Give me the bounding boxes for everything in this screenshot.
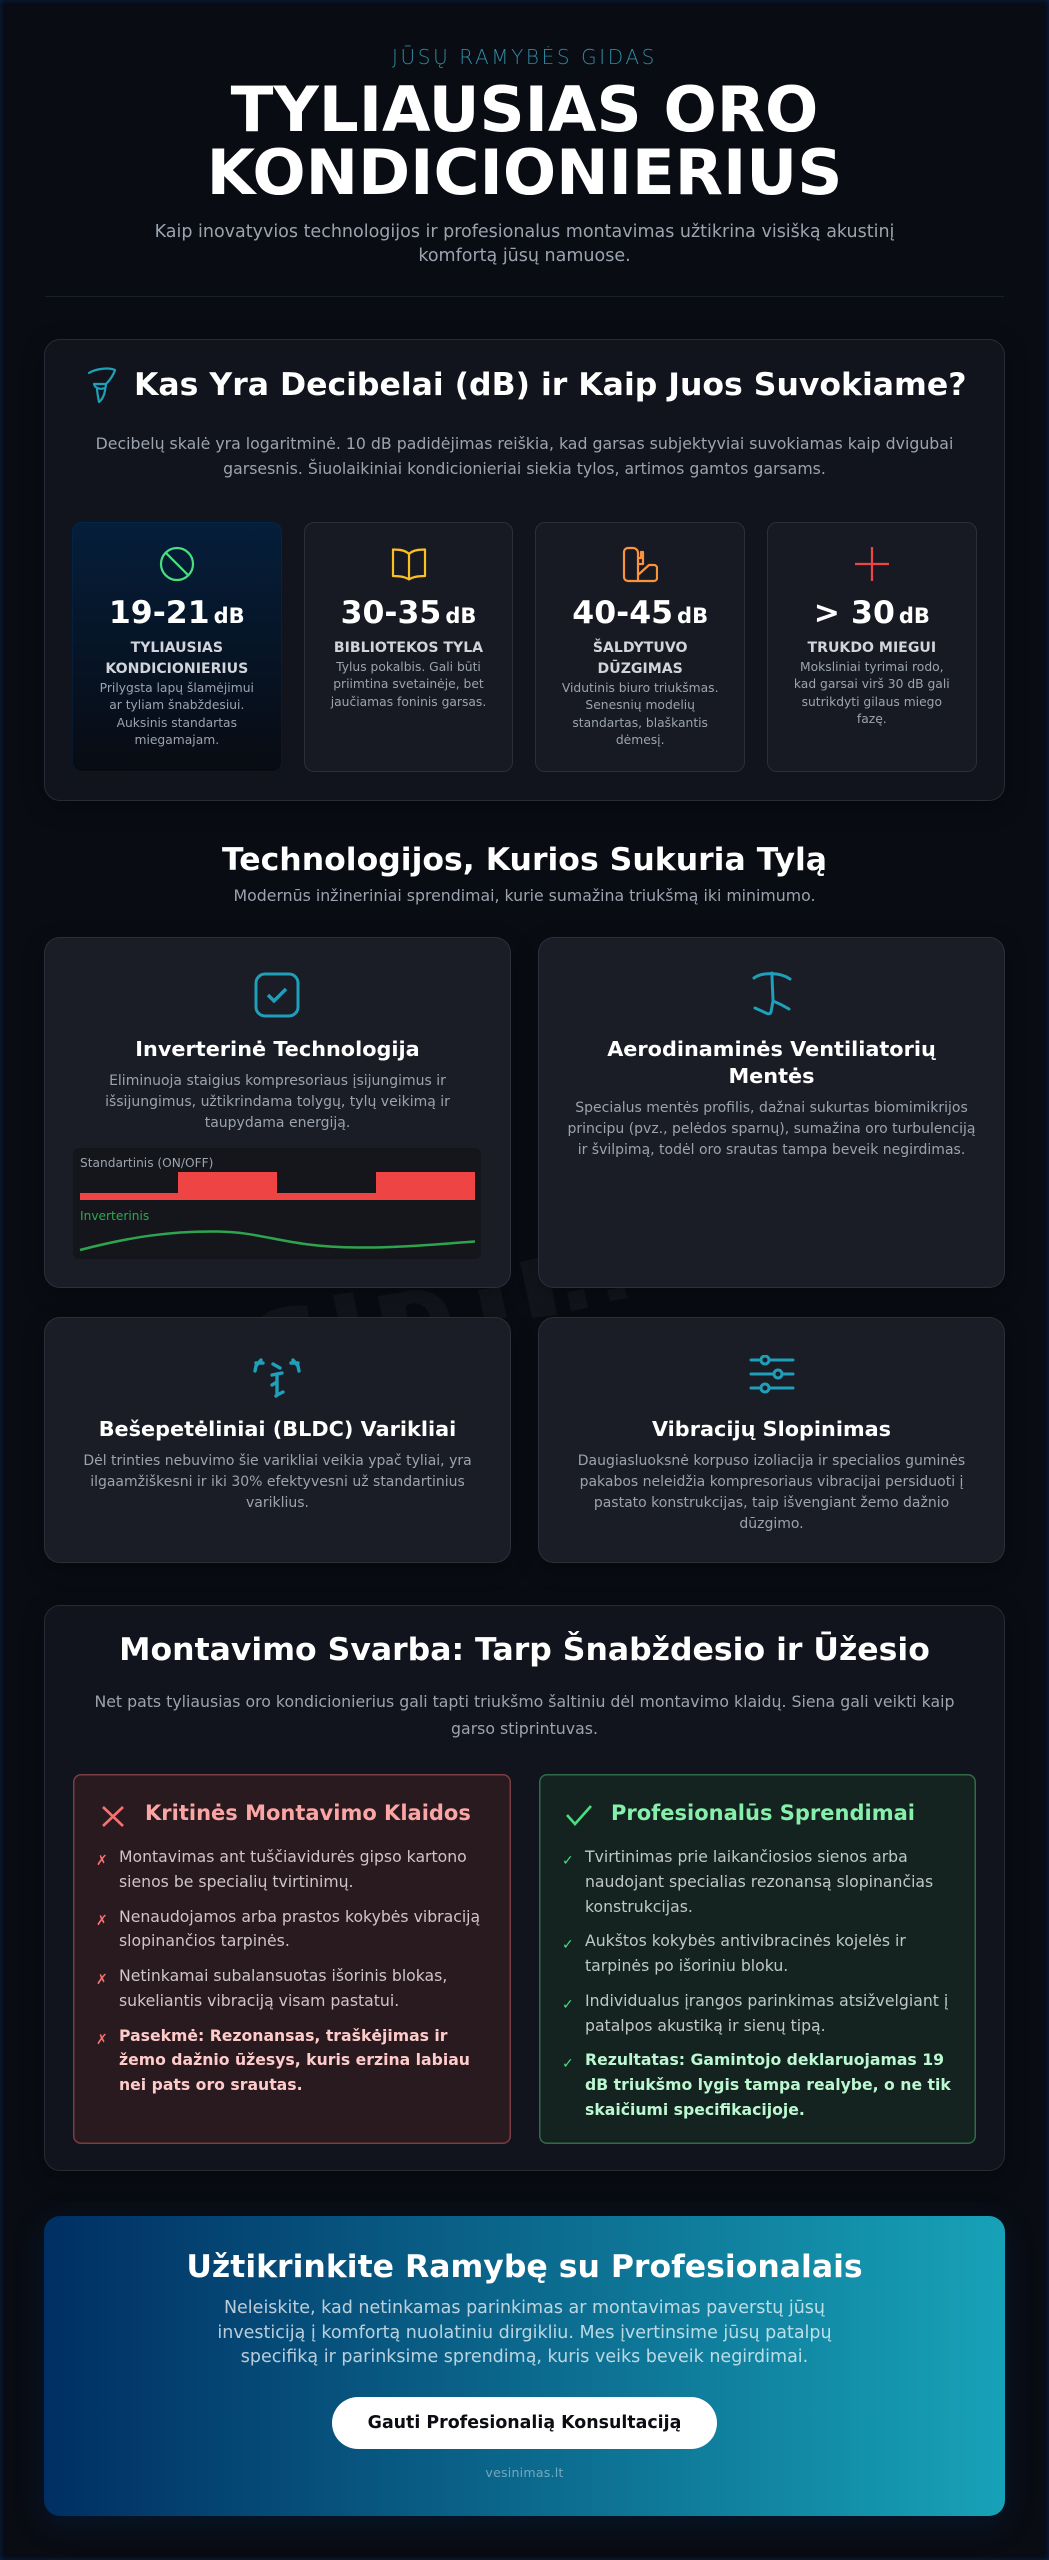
value: 19-21dB xyxy=(109,595,245,631)
description: sutrikdyti gilaus miego xyxy=(802,694,942,708)
icon: checkbox xyxy=(254,972,300,1018)
subpanel: professional solutions xyxy=(539,1774,976,2144)
card text xyxy=(578,1416,965,1532)
card text: variklius. xyxy=(246,1494,309,1510)
section heading: technologies: Technologijos, Kurios Sukuria Tylą xyxy=(222,842,827,878)
CTA text: Neleiskite, kad netinkamas parinkimas ar montavimas paverstų jūsų xyxy=(224,2298,825,2318)
description: Tylus pokalbis. Gali būti xyxy=(336,660,481,674)
stat card: 40-45 dB xyxy=(535,522,745,772)
intro text: garsesnis. Šiuolaikiniai kondicionieriai siekia tylos, artimos gamtos garsams. xyxy=(223,459,826,478)
subpanel heading: Profesionalūs Sprendimai xyxy=(611,1801,915,1825)
description: priimtina svetainėje, bet xyxy=(333,677,484,691)
card text: principu (pvz., pelėdos sparnų), sumažina oro turbulenciją xyxy=(568,1121,975,1137)
icon: plus xyxy=(855,547,889,581)
CTA text: specifiką ir parinksime sprendimą, kuris veiks beveik negirdimai. xyxy=(241,2347,808,2367)
subpanel: critical mistakes: ✗ xyxy=(96,2032,108,2048)
card text: Bešepetėliniai (BLDC) Varikliai xyxy=(99,1416,456,1440)
description: ŠALDYTUVO xyxy=(593,640,688,656)
intro text: Net pats tyliausias oro kondicionierius gali tapti triukšmo šaltiniu dėl montavimo klaidų. Siena gali veikti kaip xyxy=(94,1692,955,1710)
description: ar tyliam šnabždesiui. xyxy=(109,698,244,712)
card text: Eliminuoja staigius kompresoriaus įsijungimus ir xyxy=(109,1072,446,1088)
description: DŪZGIMAS xyxy=(598,660,683,676)
panel heading: Montavimo Svarba: Tarp Šnabždesio ir Ūžesio xyxy=(119,1632,930,1668)
section subtitle: Modernūs inžineriniai sprendimai, kurie sumažina triukšmą iki minimumo. xyxy=(234,886,815,905)
description xyxy=(100,640,254,747)
icon: motor xyxy=(253,1358,301,1398)
mistakes list: Netinkamai subalansuotas išorinis blokas, xyxy=(119,1966,447,1985)
value: > 30dB xyxy=(814,595,930,631)
card text: Daugiasluoksnė korpuso izoliacija ir specialios guminės xyxy=(578,1452,965,1468)
icon: prohibited circle xyxy=(160,546,194,582)
icon: fan blade xyxy=(752,972,792,1016)
subpanel: professional solutions: ✓ xyxy=(562,2056,574,2072)
CTA text: investiciją į komfortą nuolatiniu dirgikliu. Mes įvertinsime jūsų patalpų xyxy=(217,2323,832,2343)
description xyxy=(562,638,718,747)
solutions list: tarpinės po išoriniu bloku. xyxy=(585,1956,788,1975)
solutions list: skaičiumi specifikacijoje. xyxy=(585,2100,805,2119)
CTA button xyxy=(332,2397,717,2449)
subpanel: professional solutions: ✓ xyxy=(562,1997,574,2013)
mistakes list: sukeliantis vibraciją visam pastatui. xyxy=(119,1991,399,2010)
panel heading: Kas Yra Decibelai (dB) ir Kaip Juos Suvokiame? xyxy=(134,367,967,403)
card text xyxy=(568,1036,975,1158)
panel: call to action xyxy=(44,2216,1005,2516)
description: KONDICIONIERIUS xyxy=(105,660,248,676)
panel: vibration damping xyxy=(538,1317,1005,1563)
card text: taupydama energiją. xyxy=(205,1114,350,1130)
description: Prilygsta lapų šlamėjimui xyxy=(100,680,254,694)
icon: book xyxy=(392,548,426,581)
intro text: Decibelų skalė yra logaritminė. 10 dB padidėjimas reiškia, kad garsas subjektyviai suvokiamas kaip dvigubai xyxy=(96,434,953,453)
panel: installation xyxy=(44,1605,1005,2171)
stat card: 19-21 dB xyxy=(72,522,282,772)
subpanel: professional solutions: ✓ xyxy=(562,1937,574,1953)
footer link: vesinimas.lt xyxy=(485,2465,564,2480)
mistakes list: Montavimas ant tuščiavidurės gipso kartono xyxy=(119,1847,467,1866)
subpanel: critical mistakes: ✗ xyxy=(96,1913,108,1929)
card text: Inverterinė Technologija xyxy=(135,1036,420,1060)
icon: sliders xyxy=(750,1355,794,1394)
value: 40-45dB xyxy=(572,595,708,631)
subpanel heading: Kritinės Montavimo Klaidos xyxy=(145,1801,471,1825)
stat card: 30-35 dB xyxy=(304,522,513,772)
card text: Aerodinaminės Ventiliatorių xyxy=(607,1036,936,1060)
card text: pakabos neleidžia kompresoriaus vibracijai persiduoti į xyxy=(580,1474,963,1490)
icon: decibel flag xyxy=(88,367,116,404)
description: Auksinis standartas xyxy=(117,716,237,730)
description: Moksliniai tyrimai rodo, xyxy=(800,660,944,674)
description: Senesnių modelių xyxy=(585,698,695,712)
comparison chart: Standartinis (ON/OFF) xyxy=(80,1156,213,1170)
description: BIBLIOTEKOS TYLA xyxy=(334,640,483,656)
description: fazę. xyxy=(857,712,887,726)
icon: check xyxy=(566,1805,592,1826)
description xyxy=(330,640,486,708)
title: KONDICIONIERIUS xyxy=(207,136,842,208)
mistakes list: žemo dažnio ūžesys, kuris erzina labiau xyxy=(119,2050,470,2069)
intro text: garso stiprintuvas. xyxy=(451,1718,598,1738)
card text: išsijungimus, užtikrindama tolygų, tylų veikimą ir xyxy=(105,1094,450,1110)
solutions list: patalpos akustiką ir sienų tipą. xyxy=(585,2016,826,2035)
subtitle: komfortą jūsų namuose. xyxy=(418,246,631,266)
description: TRUKDO MIEGUI xyxy=(808,640,936,656)
description xyxy=(794,640,950,726)
value: 30-35dB xyxy=(341,595,476,631)
panel: decibels xyxy=(44,339,1005,801)
card text: Dėl trinties nebuvimo šie varikliai veikia ypač tyliai, yra xyxy=(83,1452,472,1468)
CTA text xyxy=(217,2298,832,2367)
solutions list: konstrukcijas. xyxy=(585,1897,693,1916)
panel: aerodynamic blades xyxy=(538,937,1005,1288)
subpanel: critical mistakes xyxy=(73,1774,511,2144)
mistakes list xyxy=(96,1847,480,2094)
description: miegamajam. xyxy=(134,733,219,747)
panel: BLDC motors xyxy=(44,1317,511,1563)
subpanel: critical mistakes: ✗ xyxy=(96,1972,108,1988)
description: kad garsai virš 30 dB gali xyxy=(794,677,950,691)
CTA button: Gauti Profesionalią Konsultaciją xyxy=(368,2413,681,2433)
title xyxy=(207,72,842,208)
mistakes list: nei pats oro srautas. xyxy=(119,2075,303,2094)
comparison chart xyxy=(73,1148,481,1259)
solutions list: Rezultatas: Gamintojo deklaruojamas 19 xyxy=(585,2050,944,2069)
mistakes list: sienos be specialių tvirtinimų. xyxy=(119,1872,354,1891)
card text: ir švilpimą, todėl oro srautas tampa beveik negirdimas. xyxy=(578,1142,965,1158)
title: TYLIAUSIAS ORO xyxy=(231,72,818,146)
subtitle: Kaip inovatyvios technologijos ir profesionalus montavimas užtikrina visišką akustinį xyxy=(155,222,894,242)
mistakes list: Pasekmė: Rezonansas, traškėjimas ir xyxy=(119,2026,448,2045)
description: Vidutinis biuro triukšmas. xyxy=(562,680,718,694)
card text xyxy=(83,1416,472,1510)
card text xyxy=(105,1036,450,1130)
description: jaučiamas foninis garsas. xyxy=(331,694,486,708)
panel: inverter technology xyxy=(44,937,511,1288)
subpanel: professional solutions: ✓ xyxy=(562,1853,574,1869)
solutions list: dB triukšmo lygis tampa realybe, o ne tik xyxy=(585,2075,951,2094)
icon: cross xyxy=(102,1806,124,1827)
subtitle xyxy=(155,222,894,266)
solutions list: Aukštos kokybės antivibracinės kojelės ir xyxy=(585,1931,906,1950)
intro text xyxy=(96,434,953,478)
intro text xyxy=(94,1692,955,1738)
card text: pastato konstrukcijas, taip išvengiant žemo dažnio xyxy=(594,1494,949,1510)
comparison chart: Inverterinis xyxy=(80,1209,149,1223)
stat card: over 30 dB xyxy=(767,522,977,772)
card text: Vibracijų Slopinimas xyxy=(652,1416,891,1440)
card text: ilgaamžiškesni ir iki 30% efektyvesni už standartinius xyxy=(90,1474,465,1490)
mistakes list: slopinančios tarpinės. xyxy=(119,1931,290,1950)
card text: Specialus mentės profilis, dažnai sukurtas biomimikrijos xyxy=(575,1100,968,1116)
eyebrow: JŪSŲ RAMYBĖS GIDAS xyxy=(392,45,657,69)
description: dėmesį. xyxy=(616,733,665,747)
solutions list: naudojant specialias rezonansą slopinančias xyxy=(585,1872,933,1891)
description: standartas, blaškantis xyxy=(572,716,708,730)
subpanel: critical mistakes: ✗ xyxy=(96,1853,108,1869)
icon: fridge xyxy=(622,546,658,582)
CTA heading: Užtikrinkite Ramybę su Profesionalais xyxy=(186,2249,863,2285)
solutions list: Tvirtinimas prie laikančiosios sienos arba xyxy=(585,1847,908,1866)
solutions list xyxy=(562,1847,951,2119)
mistakes list: Nenaudojamos arba prastos kokybės vibraciją xyxy=(119,1907,480,1926)
solutions list: Individualus įrangos parinkimas atsižvelgiant į xyxy=(585,1991,948,2010)
card text: Mentės xyxy=(728,1064,815,1088)
description: TYLIAUSIAS xyxy=(131,640,223,656)
watermark fragments behind cards xyxy=(264,1259,625,1318)
card text: dūzgimo. xyxy=(739,1516,804,1532)
